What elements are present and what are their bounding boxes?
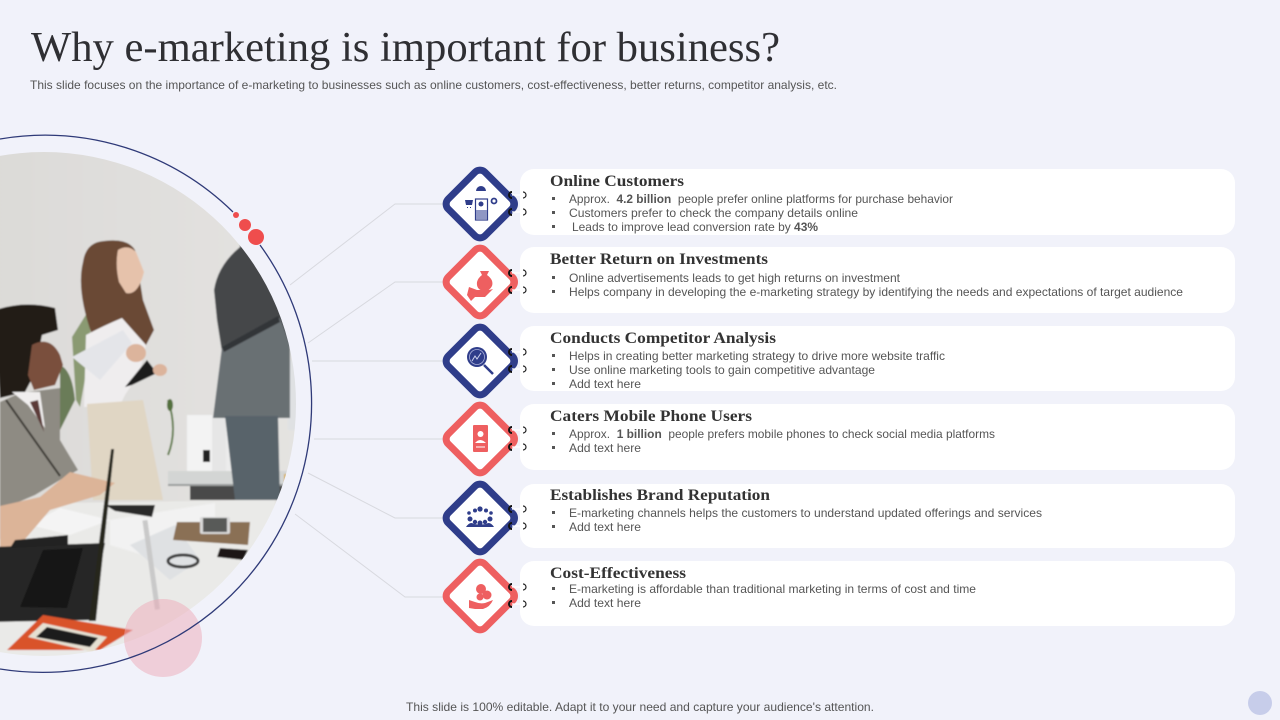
bullets: Use online marketing tools to gain competitive advantage: [569, 363, 875, 377]
icon diamond: gears in hand: [443, 559, 526, 633]
footer note: This slide is 100% editable. Adapt it to your need and capture your audience's attention.: [406, 700, 874, 714]
corner circle: [1248, 691, 1272, 715]
office photo: [0, 150, 300, 670]
bullets: E-marketing channels helps the customers to understand updated offerings and services: [569, 506, 1042, 520]
heading: Conducts Competitor Analysis: [550, 330, 776, 347]
desk items: [7, 505, 250, 652]
heading: Caters Mobile Phone Users: [550, 408, 752, 425]
outer arc: [0, 135, 312, 672]
bullets: Approx. 1 billion people prefers mobile phones to check social media platforms: [569, 427, 995, 441]
bullets: Approx. 4.2 billion people prefer online platforms for purchase behavior: [569, 192, 953, 206]
bullets: Add text here: [569, 596, 641, 610]
title: Why e-marketing is important for business?: [31, 25, 780, 71]
heading: Better Return on Investments: [550, 251, 768, 268]
bullets: Add text here: [569, 441, 641, 455]
bullets: E-marketing is affordable than traditional marketing in terms of cost and time: [569, 582, 976, 596]
heading: Online Customers: [550, 173, 684, 190]
bullets: Add text here: [569, 377, 641, 391]
card: Better Return on Investments: [443, 245, 1235, 319]
heading: Establishes Brand Reputation: [550, 487, 770, 504]
icon diamond: money bag in hand: [443, 245, 526, 319]
bullets: [552, 271, 1183, 299]
pink circle: [124, 599, 202, 677]
standing man: [212, 244, 291, 500]
card: Conducts Competitor Analysis: [443, 324, 1235, 398]
bullets: Helps in creating better marketing strategy to drive more website traffic: [569, 349, 945, 363]
icon diamond: magnifier chart: [443, 324, 526, 398]
connector lines: [290, 204, 443, 597]
woman: [60, 240, 167, 500]
subtitle: This slide focuses on the importance of e-marketing to businesses such as online customers, cost-effectiveness, better returns, competitor analysis, etc.: [30, 78, 837, 92]
arm: [0, 472, 115, 550]
plant: [168, 400, 173, 455]
icon diamond: mobile phone: [443, 402, 526, 476]
card: Establishes Brand Reputation: [443, 481, 1235, 555]
card: Online Customers: [443, 167, 1235, 241]
laptop: [0, 450, 113, 622]
heading: Cost-Effectiveness: [550, 565, 686, 582]
bullets: Leads to improve lead conversion rate by 43%: [572, 220, 818, 234]
card: Caters Mobile Phone Users: [443, 402, 1235, 476]
shelf boxes and glass table: [168, 415, 298, 500]
icon diamond: stars and people: [443, 481, 526, 555]
papers: [30, 503, 215, 610]
bullets: [552, 427, 995, 455]
seated man: [0, 304, 78, 510]
card: Cost-Effectiveness: [443, 559, 1235, 633]
icon diamond: online customers: [443, 167, 526, 241]
desk: [0, 501, 257, 656]
bullets: [552, 506, 1042, 534]
bullets: [552, 582, 976, 610]
bullets: Customers prefer to check the company details online: [569, 206, 858, 220]
bullets: Helps company in developing the e-marketing strategy by identifying the needs and expectations of target audience: [569, 285, 1183, 299]
bullets: [552, 192, 953, 234]
right wall strip: [288, 360, 298, 430]
bullets: Online advertisements leads to get high returns on investment: [569, 271, 901, 285]
bullets: Add text here: [569, 520, 641, 534]
bullets: [552, 349, 945, 391]
accent dots: [233, 212, 264, 245]
